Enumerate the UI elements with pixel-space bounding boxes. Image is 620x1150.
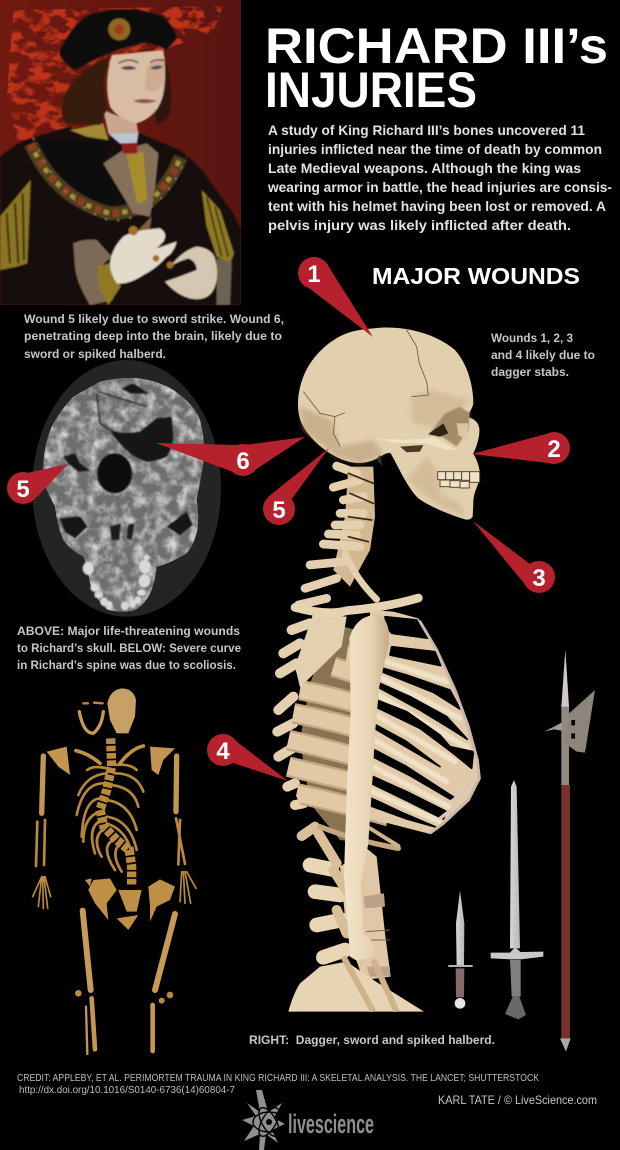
credit line (17, 1073, 539, 1096)
skull profile (298, 328, 480, 520)
anatomical skeleton: skull and neck (298, 328, 480, 605)
teeth (438, 472, 480, 488)
forensic skull photograph (32, 360, 221, 617)
teeth (83, 555, 151, 610)
intro paragraph: injuries inflicted near the time of death by common (268, 141, 602, 157)
note: wounds 1 to 4 (491, 331, 595, 379)
head (103, 110, 138, 133)
wound marker 5 on photograph (7, 464, 68, 504)
note: wounds 1 to 4: dagger stabs. (491, 365, 569, 379)
wound marker 3: 3 (532, 565, 546, 592)
note: above and below captions: in Richard’s spine was due to scoliosis. (17, 658, 236, 672)
halberd (544, 649, 595, 1052)
wound marker 1: 1 (307, 261, 321, 288)
note: wounds 5 and 6: Wound 5 likely due to sword strike. Wound 6, (24, 312, 284, 326)
sleeves (0, 180, 31, 270)
cheek arch (375, 437, 457, 450)
intro paragraph: A study of King Richard III’s bones uncovered 11 (268, 122, 585, 138)
wound marker 6 with two pointers (156, 437, 305, 476)
note: above and below captions: to Richard’s skull. BELOW: Severe curve (17, 641, 241, 655)
black gaps between ribs (370, 617, 473, 827)
arm bone (344, 615, 389, 961)
wound marker 6 with two pointers: 6 (236, 448, 250, 475)
lower spine (340, 848, 391, 980)
note: above and below captions: ABOVE: Major life-threatening wounds (17, 624, 240, 638)
dagger (448, 891, 473, 1009)
spine processes behind ribs (277, 623, 310, 805)
intro paragraph: wearing armor in battle, the head injuries are consis- (267, 179, 612, 195)
cartilage edge of chest (420, 622, 479, 833)
intro paragraph: Late Medieval weapons. Although the king was (268, 160, 581, 176)
portrait of King Richard III (0, 0, 241, 305)
wound marker 4 (207, 734, 288, 781)
wound 5 hole (63, 453, 90, 472)
front of rib cage with black gaps (369, 610, 480, 846)
title: INJURIES (265, 62, 477, 118)
gold chain collar (31, 138, 187, 221)
wound marker 5 on skeleton (263, 448, 329, 525)
skull sutures (303, 330, 428, 447)
credit line: http://dx.doi.org/10.1016/S0140-6736(14)60804-7 (19, 1085, 235, 1096)
note: wounds 1 to 4: Wounds 1, 2, 3 (491, 331, 573, 345)
excavated remains with curved spine (33, 688, 196, 1054)
sword (491, 780, 543, 1019)
note: wounds 1 to 4: and 4 likely due to (491, 348, 595, 362)
ribs left of the arm (286, 644, 387, 826)
wound marker 5 on photograph: 5 (16, 476, 30, 503)
anatomical skeleton: torso (277, 598, 483, 1012)
logo wordmark: livescience (288, 1109, 374, 1139)
note: wounds 5 and 6: sword or spiked halberd. (24, 347, 166, 361)
wound marker 1 (298, 257, 373, 337)
rib highlights (372, 662, 468, 822)
neck vertebrae (298, 466, 377, 605)
hands (165, 247, 217, 299)
intro paragraph (267, 122, 612, 233)
wound marker 2: 2 (547, 436, 561, 463)
wound 6 hole (110, 417, 173, 462)
title (265, 18, 608, 118)
eye socket (428, 407, 470, 447)
wound marker 5 on skeleton: 5 (272, 497, 286, 524)
credit line: CREDIT: APPLEBY, ET AL. PERIMORTEM TRAUMA IN KING RICHARD III: A SKELETAL ANALYSIS. THE LANCET; SHUTTERSTOCK (17, 1073, 539, 1084)
heading: major wounds: MAJOR WOUNDS (372, 263, 580, 289)
intro paragraph: tent with his helmet having been lost or removed. A (268, 198, 606, 214)
note: wounds 5 and 6 (24, 312, 284, 361)
title: RICHARD III’s (265, 18, 608, 74)
hat brooch (108, 18, 130, 40)
note: wounds 5 and 6: penetrating deep into the brain, likely due to (24, 329, 282, 343)
intro paragraph: pelvis injury was likely inflicted after death. (268, 217, 571, 233)
logo: livescience (242, 1090, 374, 1150)
wound marker 2 (472, 432, 570, 464)
logo splat and atom (242, 1090, 285, 1150)
note: above and below captions (17, 624, 241, 672)
pelvis (288, 962, 424, 1012)
wound marker 4: 4 (216, 738, 230, 765)
doublet and shirt (103, 143, 158, 217)
weapons: dagger, sword and spiked halberd (448, 649, 595, 1052)
scapula and collarbone (295, 613, 347, 687)
byline: KARL TATE / © LiveScience.com (438, 1093, 597, 1107)
caption: weapons: RIGHT: Dagger, sword and spiked halberd. (249, 1033, 495, 1047)
wound marker 3 (473, 521, 555, 593)
